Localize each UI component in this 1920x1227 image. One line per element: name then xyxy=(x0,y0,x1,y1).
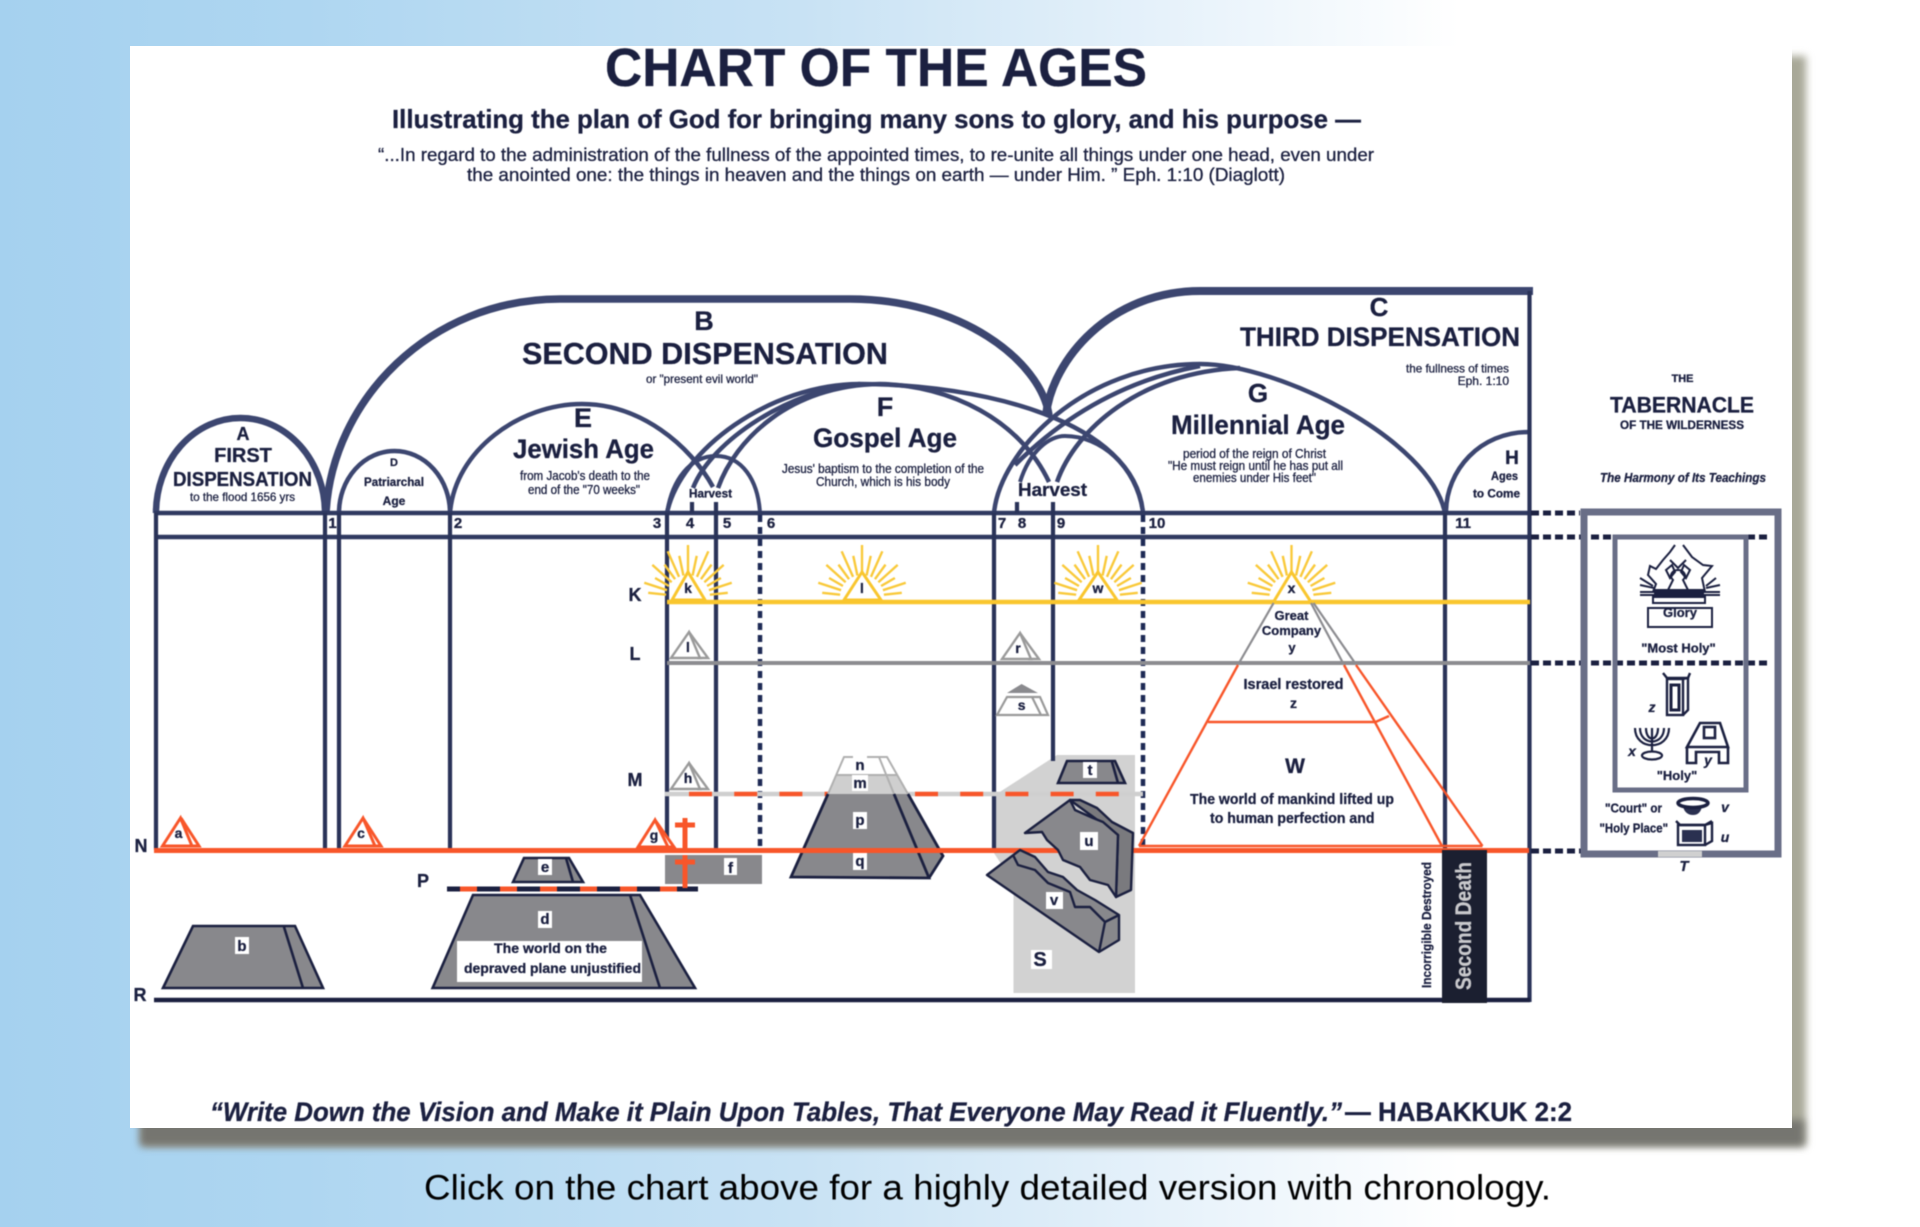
ages to come labels: H xyxy=(1505,448,1519,469)
patriarchal age labels xyxy=(364,457,424,508)
panel shadow bottom xyxy=(140,1120,1804,1146)
period numbers: 10 xyxy=(1149,515,1165,532)
tabernacle title: OF THE WILDERNESS xyxy=(1620,418,1744,432)
triangle c: c xyxy=(357,825,365,841)
first dispensation labels: to the flood 1656 yrs xyxy=(190,490,295,504)
arch: jewish age xyxy=(450,404,713,513)
rayed triangle k xyxy=(644,545,732,600)
tabernacle outer court xyxy=(1584,512,1778,854)
period numbers xyxy=(328,515,1471,532)
plane letters: K xyxy=(628,585,642,605)
scripture quote xyxy=(378,144,1374,185)
arch: third dispensation xyxy=(1046,291,1533,415)
icon: ark with glory: Glory xyxy=(1663,605,1698,620)
plane letters: L xyxy=(630,644,640,664)
first dispensation labels: FIRST xyxy=(214,445,272,467)
scripture quote: the anointed one: the things in heaven and the things on earth — under Him. ” Eph. 1:10 (Diaglott) xyxy=(467,164,1285,185)
letter u: u xyxy=(1721,829,1730,845)
letter T: T xyxy=(1679,858,1690,875)
triangle g xyxy=(638,820,674,847)
rayed triangle x xyxy=(1248,545,1335,602)
big pyramid w xyxy=(1139,603,1482,846)
court label: "Holy Place" xyxy=(1600,822,1668,836)
pyramid labels: Great xyxy=(1275,608,1309,623)
third dispensation labels: Eph. 1:10 xyxy=(1458,374,1509,388)
millennial age labels xyxy=(1168,378,1345,485)
f box: f xyxy=(728,860,734,877)
trapezoid d xyxy=(433,895,695,988)
broken block u: u xyxy=(1084,833,1094,850)
letter v: v xyxy=(1721,799,1730,815)
first dispensation labels: DISPENSATION xyxy=(173,469,312,491)
dashed connectors to tabernacle xyxy=(1531,513,1771,851)
horizontal time bands xyxy=(154,513,1530,537)
gospel age labels xyxy=(782,392,984,489)
S gray region xyxy=(992,755,1135,993)
second harvest label: Harvest xyxy=(1018,480,1087,500)
arches: gospel age xyxy=(667,384,1143,513)
letter S xyxy=(1031,949,1052,971)
plane L gray line xyxy=(667,661,1530,665)
first harvest label: Harvest xyxy=(689,486,732,500)
incorrigible destroyed label: Incorrigible Destroyed xyxy=(1419,862,1434,988)
trapezoid s: s xyxy=(1018,697,1026,713)
trapezoid e xyxy=(513,858,583,882)
plane letters: P xyxy=(417,871,429,891)
second death bar: Second Death xyxy=(1451,862,1476,990)
rayed triangle l: l xyxy=(860,580,864,596)
triangle i xyxy=(671,632,708,658)
icon: ark with glory xyxy=(1640,545,1720,627)
plane letters: M xyxy=(628,770,642,790)
trapezoid b: b xyxy=(237,938,247,955)
scripture quote: “...In regard to the administration of the fullness of the appointed times, to re-unite all things under one head, even under xyxy=(378,144,1374,165)
millennial age labels: Millennial Age xyxy=(1171,410,1345,440)
pyramid labels: W xyxy=(1285,755,1305,778)
tabernacle title xyxy=(1600,373,1766,485)
arch: patriarchal age xyxy=(339,451,450,513)
icon: incense altar xyxy=(1663,673,1690,715)
period numbers: 6 xyxy=(767,515,775,532)
plane K yellow line xyxy=(667,600,1530,604)
tabernacle inner room xyxy=(1615,537,1746,790)
arch: first dispensation xyxy=(156,418,325,513)
jewish age labels: from Jacob's death to the xyxy=(520,469,650,483)
millennial age labels: enemies under His feet" xyxy=(1193,471,1316,485)
first dispensation labels: A xyxy=(236,424,250,444)
cross xyxy=(675,818,695,888)
triangle r xyxy=(1002,633,1039,659)
second death bar xyxy=(1442,850,1487,1003)
trapezoid e: e xyxy=(541,859,549,876)
patriarchal age labels: Age xyxy=(383,494,406,508)
dashed dividers xyxy=(760,515,1143,850)
triangle a xyxy=(162,818,199,846)
second dispensation labels xyxy=(522,306,888,386)
pyramid labels: z xyxy=(1290,695,1297,711)
gospel age labels: Gospel Age xyxy=(813,423,957,453)
gospel age labels: Jesus' baptism to the completion of the xyxy=(782,462,984,476)
panel shadow xyxy=(142,56,1806,1146)
millennial age labels: period of the reign of Christ xyxy=(1183,447,1326,461)
period numbers: 3 xyxy=(653,515,661,532)
period numbers: 2 xyxy=(454,515,462,532)
rayed triangle x: x xyxy=(1288,580,1296,596)
tabernacle title: TABERNACLE xyxy=(1610,392,1754,418)
ages to come labels: Ages xyxy=(1491,469,1518,483)
trapezoid t xyxy=(1058,761,1125,783)
letter z: z xyxy=(1648,699,1656,715)
triangle h: h xyxy=(684,770,692,786)
pyramid caption xyxy=(1190,791,1394,827)
gospel age labels: F xyxy=(877,392,893,422)
rayed triangle w xyxy=(1054,545,1142,600)
triangle h xyxy=(671,763,708,789)
icon: brazen altar xyxy=(1676,821,1712,845)
first dispensation labels xyxy=(173,424,312,504)
rayed triangle l xyxy=(818,545,906,600)
tabernacle title: THE xyxy=(1672,373,1694,385)
pyramid labels: y xyxy=(1288,640,1296,655)
most holy label: "Most Holy" xyxy=(1641,641,1716,656)
arch: ages to come xyxy=(1446,432,1529,513)
trapezoid d: depraved plane unjustified xyxy=(464,960,641,976)
millennial age labels: G xyxy=(1248,378,1268,408)
jewish age labels: Jewish Age xyxy=(513,434,654,464)
period numbers: 1 xyxy=(328,515,337,532)
bottom quote: — HABAKKUK 2:2 xyxy=(1345,1097,1572,1127)
triangle g: g xyxy=(650,827,658,843)
vertical dividers xyxy=(156,291,1530,1002)
letter y: y xyxy=(1703,752,1713,768)
patriarchal age labels: D xyxy=(390,457,398,469)
arch: second harvest xyxy=(1020,436,1143,513)
pyramid caption: The world of mankind lifted up xyxy=(1190,791,1394,808)
trapezoid d: d xyxy=(540,911,550,928)
pyramid labels: Israel restored xyxy=(1244,677,1343,693)
pyramid n m p q: n xyxy=(855,757,865,774)
second dispensation labels: B xyxy=(694,306,714,336)
ages to come labels xyxy=(1473,448,1520,500)
pyramid n m p q xyxy=(791,756,943,878)
period numbers: 9 xyxy=(1057,515,1065,532)
pyramid n m p q: q xyxy=(855,853,865,870)
arch: first harvest xyxy=(667,456,760,513)
letter S: S xyxy=(1033,949,1047,971)
tabernacle diagram xyxy=(1584,512,1778,875)
triangle a: a xyxy=(175,825,183,841)
third dispensation labels: C xyxy=(1370,292,1389,322)
ages to come labels: to Come xyxy=(1473,486,1520,500)
period numbers: 11 xyxy=(1455,515,1471,532)
court label: "Court" or xyxy=(1605,802,1662,816)
plane P dashed line xyxy=(447,886,698,892)
subtitle: Illustrating the plan of God for bringing many sons to glory, and his purpose — xyxy=(392,104,1361,134)
patriarchal age labels: Patriarchal xyxy=(364,475,424,489)
period numbers: 8 xyxy=(1018,515,1026,532)
pyramid n m p q: p xyxy=(855,812,865,829)
second dispensation labels: SECOND DISPENSATION xyxy=(522,336,888,371)
plane letters xyxy=(134,585,642,1005)
period numbers: 7 xyxy=(998,515,1006,532)
broken block v xyxy=(987,850,1119,952)
trapezoid d: The world on the xyxy=(494,940,607,956)
pyramid n m p q: m xyxy=(853,775,867,792)
triangle r: r xyxy=(1015,640,1021,656)
plane letters: R xyxy=(134,985,146,1005)
jewish age labels: E xyxy=(574,403,592,433)
third dispensation labels xyxy=(1240,292,1520,388)
second dispensation labels: or "present evil world" xyxy=(646,372,758,386)
footer note: Click on the chart above for a highly detailed version with chronology. xyxy=(424,1168,1551,1208)
court label xyxy=(1600,802,1668,836)
bottom quote: “Write Down the Vision and Make it Plain Upon Tables, That Everyone May Read it Fluently.” xyxy=(210,1097,1342,1127)
millennial age labels: "He must reign until he has put all xyxy=(1168,459,1343,473)
trapezoid t: t xyxy=(1088,762,1092,779)
court gate xyxy=(1658,851,1702,857)
triangle c xyxy=(345,818,381,846)
broken block v: v xyxy=(1050,892,1059,909)
plane M dashed line xyxy=(665,792,1143,796)
arch: second dispensation xyxy=(326,299,1049,513)
third dispensation labels: THIRD DISPENSATION xyxy=(1240,322,1520,352)
icon: laver xyxy=(1678,798,1708,815)
rayed triangle k: k xyxy=(684,580,692,596)
triangle i: l xyxy=(686,639,690,655)
title: CHART OF THE AGES xyxy=(605,38,1147,98)
plane letters: N xyxy=(134,836,148,856)
pyramid labels xyxy=(1244,608,1343,778)
broken block u xyxy=(1025,800,1133,897)
plane N red line xyxy=(154,848,1529,853)
letter x: x xyxy=(1627,743,1637,759)
holy label: "Holy" xyxy=(1657,768,1697,783)
gospel age labels: Church, which is his body xyxy=(816,475,951,489)
pyramid labels: Company xyxy=(1262,623,1322,638)
icon: table of shewbread xyxy=(1687,723,1728,763)
jewish age labels xyxy=(513,403,654,497)
period numbers: 4 xyxy=(686,515,695,532)
rayed triangle w: w xyxy=(1092,580,1104,596)
icon: menorah xyxy=(1635,728,1669,760)
white chart panel xyxy=(130,46,1792,1128)
trapezoid b xyxy=(163,926,323,988)
period numbers: 5 xyxy=(723,515,731,532)
tabernacle title: The Harmony of Its Teachings xyxy=(1600,470,1766,485)
f box xyxy=(665,855,762,884)
pyramid caption: to human perfection and xyxy=(1210,810,1374,827)
trapezoid s xyxy=(997,684,1048,715)
plane R black line xyxy=(154,998,1530,1002)
third dispensation labels: the fullness of times xyxy=(1406,362,1509,376)
arches and structural lines xyxy=(154,291,1533,1002)
arches: millennial age xyxy=(994,364,1445,513)
jewish age labels: end of the "70 weeks" xyxy=(528,483,640,497)
